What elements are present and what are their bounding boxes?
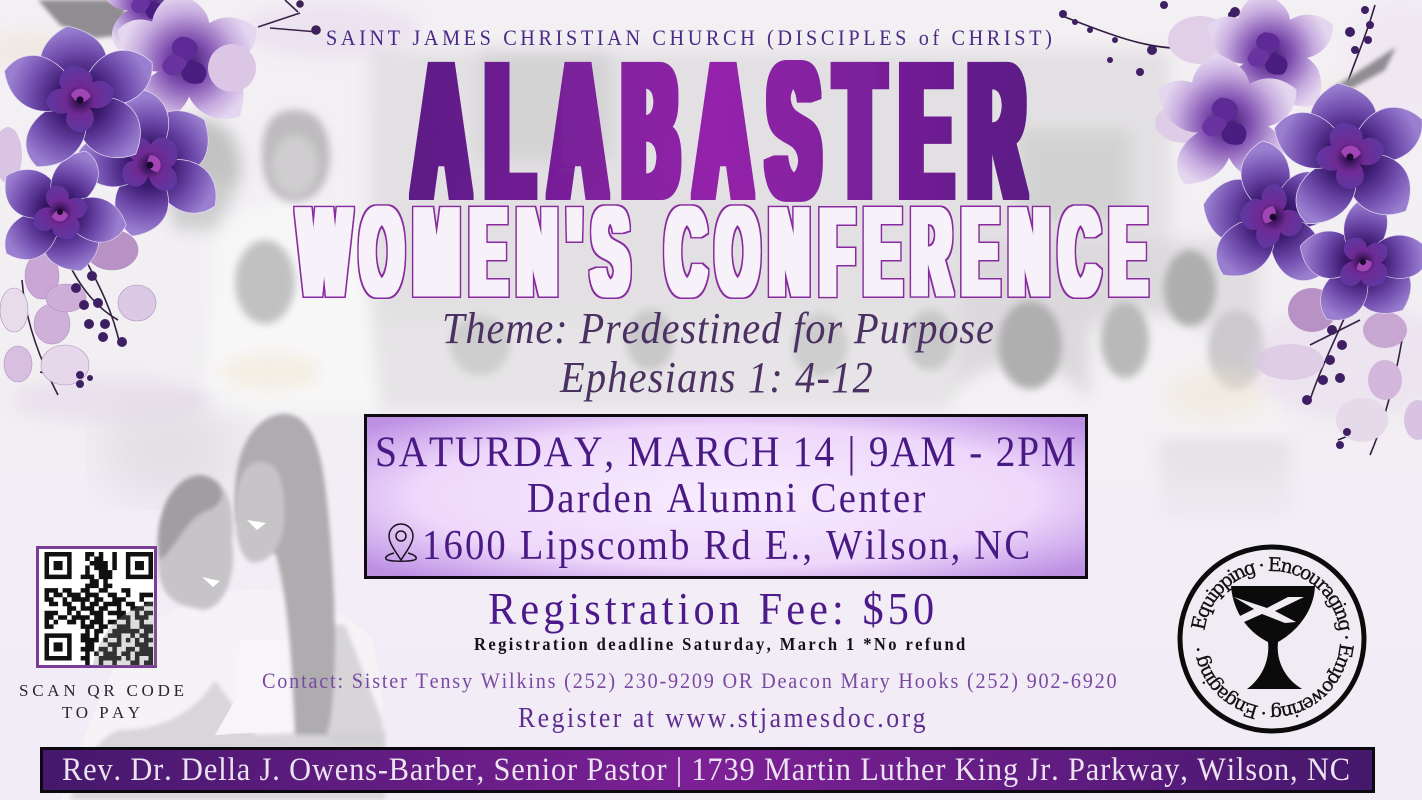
background photo: church women group (160, 50, 1290, 520)
venue name: Darden Alumni Center (527, 475, 926, 521)
left flower cluster (0, 0, 256, 395)
right flower cluster (1059, 0, 1422, 455)
panel: date and venue (366, 416, 1086, 578)
registration website: Register at www.stjamesdoc.org (518, 702, 926, 733)
QR modules (45, 552, 153, 663)
title: WOMEN'S CONFERENCE: WOMEN'S CONFERENCE (299, 183, 1146, 322)
title: ALABASTER: ALABASTER (414, 23, 1024, 238)
contact line: Contact: Sister Tensy Wilkins (252) 230-9209 OR Deacon Mary Hooks (252) 902-6920 (262, 668, 1117, 693)
top sprigs (258, 0, 320, 34)
title: church name: SAINT JAMES CHRISTIAN CHURCH (DISCIPLES of CHRIST) (326, 25, 1052, 50)
icon: chalice (1231, 586, 1315, 689)
pale floral wash (0, 0, 1422, 424)
registration deadline: Registration deadline Saturday, March 1 *No refund (474, 634, 966, 654)
photo: two women embracing (60, 400, 385, 800)
venue address: 1600 Lipscomb Rd E., Wilson, NC (422, 522, 1030, 568)
footer bar: Rev. Dr. Della J. Owens-Barber, Senior Pastor | 1739 Martin Luther King Jr. Parkway, Wilson, NC (62, 751, 1350, 787)
icon: white cross (1234, 597, 1304, 623)
fade to lavender (0, 410, 1422, 540)
icon: location pin (386, 524, 416, 561)
QR caption: TO PAY (62, 703, 140, 722)
QR caption: SCAN QR CODE (19, 681, 184, 700)
panel: QR code (38, 548, 157, 668)
registration fee: Registration Fee: $50 (488, 583, 934, 634)
theme text: Theme: Predestined for Purpose (442, 304, 994, 353)
logo: disciples chalice seal: Equipping · Encouraging · Empowering · Engaging · (1190, 556, 1354, 720)
QR caption (19, 681, 184, 722)
date and time: SATURDAY, MARCH 14 | 9AM - 2PM (375, 427, 1076, 475)
scripture reference: Ephesians 1: 4-12 (559, 353, 873, 402)
